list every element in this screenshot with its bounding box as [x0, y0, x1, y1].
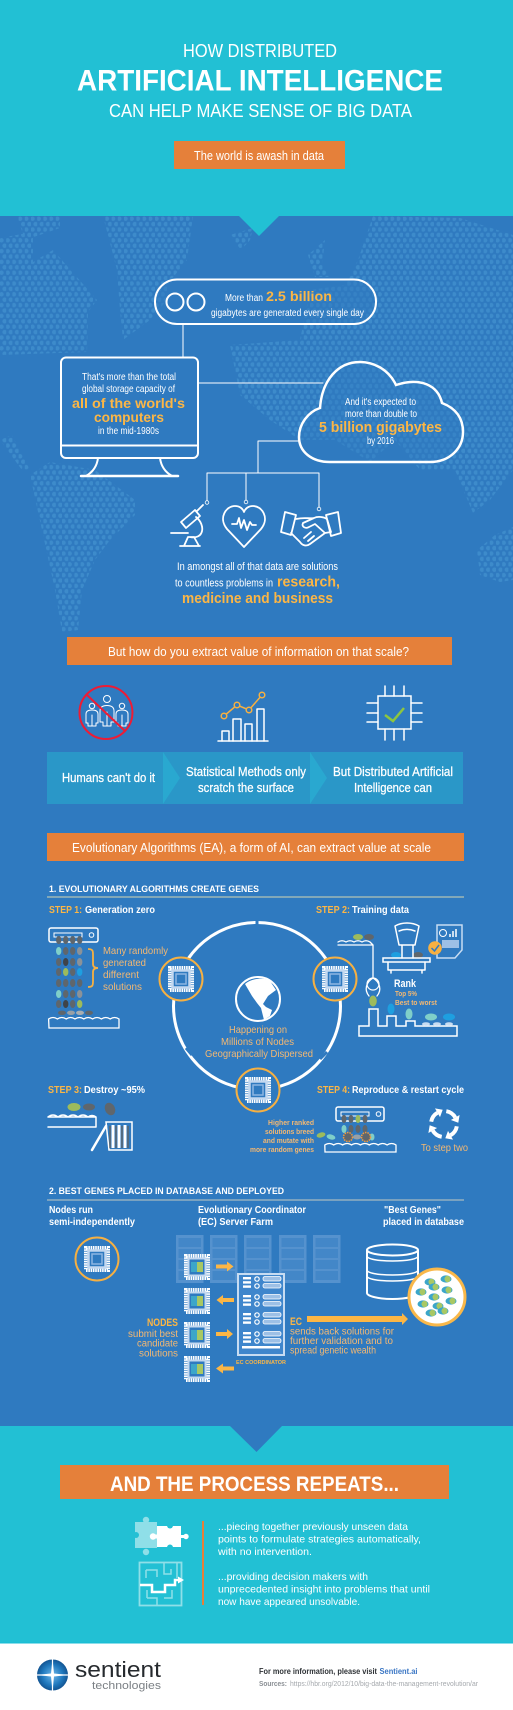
- ring connecting nodes: [174, 920, 340, 1090]
- connector: monitor to cloud: [198, 382, 323, 384]
- column heading: nodes run: Nodes run: [49, 1205, 93, 1216]
- chevron band: humans, statistics, AI: scratch the surface: [198, 781, 294, 795]
- step 3 heading: STEP 3:: [48, 1085, 82, 1096]
- text: sources: Sources:: [259, 1681, 287, 1688]
- step 2 heading: STEP 2:: [316, 905, 350, 916]
- monitor with text: That's more than the total: [82, 372, 176, 383]
- logo wordmark: sentient: [75, 1657, 161, 1682]
- text: EC sends back solutions: EC: [290, 1316, 302, 1328]
- step 3 heading: Destroy ~95%: [84, 1085, 145, 1096]
- pill: 2.5 billion gigabytes: gigabytes are generated every single day: [211, 308, 364, 319]
- text: happening on millions of nodes: [205, 1024, 313, 1060]
- text: rank: Top 5%: [395, 989, 417, 998]
- text: to step two: To step two: [421, 1143, 468, 1154]
- banner: world awash in data: The world is awash in data: [194, 148, 325, 163]
- column heading: best genes: "Best Genes": [384, 1205, 441, 1216]
- pill: 2.5 billion gigabytes: [155, 280, 376, 324]
- icon: heart with pulse: [223, 506, 265, 547]
- connector tree: cloud to icons: [205, 441, 321, 511]
- text: EC sends back solutions: sends back solutions for: [290, 1326, 395, 1338]
- closing panel: [0, 1426, 513, 1643]
- pill: 2.5 billion gigabytes: More than: [225, 293, 263, 304]
- chevron band: humans, statistics, AI: Statistical Methods only: [186, 765, 307, 779]
- text: solutions to countless problems: research,: [277, 574, 340, 590]
- step 4 heading: Reproduce & restart cycle: [352, 1085, 464, 1096]
- best genes circle: [409, 1269, 465, 1325]
- icon: bar chart with trend line: [218, 692, 268, 741]
- column heading: nodes run: [49, 1205, 135, 1228]
- text: EC sends back solutions: spread genetic wealth: [290, 1346, 376, 1356]
- monitor with text: in the mid-1980s: [98, 426, 159, 437]
- column heading: server farm: (EC) Server Farm: [198, 1217, 273, 1228]
- banner: and the process repeats: [60, 1465, 449, 1499]
- column heading: nodes run: semi-independently: [49, 1217, 135, 1228]
- section heading 2: 2. BEST GENES PLACED IN DATABASE AND DEPLOYED: [49, 1186, 284, 1197]
- pill: 2.5 billion gigabytes: 2.5 billion: [266, 288, 332, 304]
- icon: restart cycle arrows: [428, 1108, 460, 1140]
- icon: node chip semi-independent: [76, 1238, 118, 1280]
- text: solutions to countless problems: In amongst all of that data are solutions: [177, 561, 338, 573]
- text: many randomly generated solutions: solutions: [103, 981, 142, 993]
- icon: node chip right: [314, 958, 356, 1000]
- monitor with text: [61, 358, 198, 476]
- banner: how do you extract value: [67, 637, 452, 665]
- text: happening on millions of nodes: Geographically Dispersed: [205, 1048, 313, 1060]
- chevron band: humans, statistics, AI: Humans can't do it: [62, 771, 155, 785]
- text: solutions to countless problems: medicine and business: [182, 591, 333, 607]
- column heading: best genes: [383, 1205, 464, 1228]
- text: many randomly generated solutions: different: [103, 969, 139, 981]
- text: more information: Sentient.ai: [380, 1667, 418, 1676]
- title line 3: CAN HELP MAKE SENSE OF BIG DATA: [109, 100, 413, 121]
- monitor with text: global storage capacity of: [82, 384, 175, 395]
- text: nodes submit best candidate solutions: candidate: [137, 1338, 178, 1350]
- arrow: EC to best genes: [307, 1313, 408, 1325]
- chevron band: humans, statistics, AI: Intelligence can: [354, 781, 432, 795]
- monitor with text: computers: [94, 409, 164, 425]
- text: solutions to countless problems: to countless problems in: [175, 578, 273, 590]
- icon: handshake: [281, 512, 341, 545]
- step 1: gene generator and solutions: [49, 928, 119, 1028]
- step 1 heading: [49, 905, 155, 916]
- step 2: conveyor and claw: [338, 934, 380, 1006]
- icon: maze with path: [140, 1562, 184, 1606]
- icon: microscope: [171, 505, 203, 546]
- banner: evolutionary algorithms: [47, 833, 464, 861]
- icon: database cylinder: [367, 1244, 418, 1299]
- text: piecing together: points to formulate strategies automatically,: [218, 1534, 421, 1546]
- text: more information: For more information, please visit: [259, 1667, 377, 1676]
- step 1 heading: Generation zero: [85, 905, 155, 916]
- dotted world map: [0, 216, 513, 632]
- arrow: header pointer: [239, 216, 279, 236]
- text: rank: Best to worst: [395, 998, 437, 1007]
- server farm racks: [176, 1235, 340, 1283]
- logo wordmark: technologies: [92, 1680, 162, 1692]
- monitor with text: all of the world's: [72, 395, 185, 411]
- text: many randomly generated solutions: Many randomly: [103, 945, 169, 957]
- cloud with text: by 2016: [367, 436, 394, 447]
- step 2: weighing scale: [383, 923, 430, 973]
- step 4 heading: STEP 4:: [317, 1085, 350, 1096]
- icon: globe: [236, 977, 280, 1021]
- text: many randomly generated solutions: generated: [103, 957, 146, 969]
- text: higher ranked solutions breed: more random genes: [250, 1145, 314, 1154]
- header panel: [0, 0, 513, 236]
- cloud with text: 5 billion gigabytes: [319, 419, 442, 436]
- title line 1: HOW DISTRIBUTED: [183, 40, 337, 61]
- chevron band: humans, statistics, AI: [47, 752, 463, 804]
- column heading: best genes: placed in database: [383, 1217, 464, 1228]
- text: happening on millions of nodes: Millions of Nodes: [221, 1036, 294, 1048]
- icon: node chip bottom: [236, 1068, 280, 1112]
- title line 2: ARTIFICIAL INTELLIGENCE: [77, 64, 443, 98]
- text: solutions to countless problems: [175, 561, 340, 607]
- text: piecing together: [217, 1521, 421, 1558]
- text: higher ranked solutions breed: Higher ranked: [268, 1118, 314, 1127]
- arrows: nodes to and from coordinator: [216, 1262, 234, 1374]
- cloud with text: more than double to: [345, 409, 417, 420]
- step 2 heading: [316, 905, 409, 916]
- section heading 1: 1. EVOLUTIONARY ALGORITHMS CREATE GENES: [49, 884, 259, 895]
- connector: pill to monitor: [182, 324, 184, 357]
- logo mark: [36, 1659, 68, 1691]
- step 3 heading: [48, 1085, 145, 1096]
- step 2 heading: Training data: [352, 905, 409, 916]
- text: nodes submit best candidate solutions: [128, 1317, 178, 1360]
- icon: chip with check mark: [367, 686, 422, 740]
- step 3: tray and trash bin: [48, 1101, 132, 1150]
- text: rank: Rank: [394, 978, 417, 990]
- cloud with text: [299, 362, 463, 462]
- arrow: closing pointer: [230, 1426, 282, 1452]
- step 2: ranking staircase: [359, 1004, 457, 1036]
- EC coordinator server: EC COORDINATOR: [236, 1360, 286, 1366]
- text: sources: https://hbr.org/2012/10/big-data-the-management-revolution/ar: [290, 1681, 479, 1688]
- text: providing decision makers: unprecedented insight into problems that until: [218, 1584, 430, 1596]
- text: providing decision makers: ...providing decision makers with: [218, 1571, 368, 1583]
- icon: puzzle pieces: [133, 1517, 189, 1555]
- text: higher ranked solutions breed: solutions breed: [265, 1127, 314, 1136]
- step 4: reproduction machine: [316, 1107, 396, 1152]
- text: higher ranked solutions breed: [250, 1118, 314, 1154]
- divider: [202, 1521, 204, 1605]
- text: many randomly generated solutions: [103, 945, 169, 993]
- icon: humans crossed out: [80, 686, 132, 739]
- text: EC sends back solutions: further validation and to: [290, 1336, 393, 1347]
- text: providing decision makers: [218, 1571, 430, 1608]
- column heading: server farm: Evolutionary Coordinator: [198, 1205, 306, 1216]
- banner: evolutionary algorithms: Evolutionary Algorithms (EA), a form of AI, can extract value at scale: [72, 841, 431, 855]
- text: EC sends back solutions: [290, 1316, 395, 1356]
- column heading: server farm: [198, 1205, 306, 1228]
- step 1 heading: STEP 1:: [49, 905, 82, 916]
- text: nodes submit best candidate solutions: submit best: [128, 1329, 178, 1340]
- banner: world awash in data: [174, 141, 345, 169]
- EC coordinator server: [236, 1274, 286, 1366]
- text: piecing together: with no intervention.: [217, 1546, 312, 1558]
- text: piecing together: ...piecing together previously unseen data: [218, 1521, 408, 1533]
- logo wordmark: [75, 1657, 162, 1692]
- text: nodes submit best candidate solutions: solutions: [139, 1348, 178, 1360]
- cloud with text: And it's expected to: [345, 397, 416, 408]
- text: happening on millions of nodes: Happening on: [229, 1024, 287, 1036]
- banner: and the process repeats: AND THE PROCESS REPEATS...: [110, 1473, 399, 1496]
- text: higher ranked solutions breed: and mutate with: [263, 1136, 314, 1145]
- icon: node chip left: [160, 958, 202, 1000]
- text: rank: [394, 978, 437, 1007]
- chevron band: humans, statistics, AI: But Distributed Artificial: [333, 765, 453, 779]
- step 2: report document with badge: [428, 925, 462, 958]
- text: providing decision makers: now have appeared unsolvable.: [218, 1596, 360, 1608]
- node chips column: [186, 1256, 208, 1380]
- banner: how do you extract value: But how do you extract value of information on that scale?: [108, 644, 409, 659]
- footer panel: [0, 1643, 513, 1710]
- text: nodes submit best candidate solutions: NODES: [147, 1317, 178, 1329]
